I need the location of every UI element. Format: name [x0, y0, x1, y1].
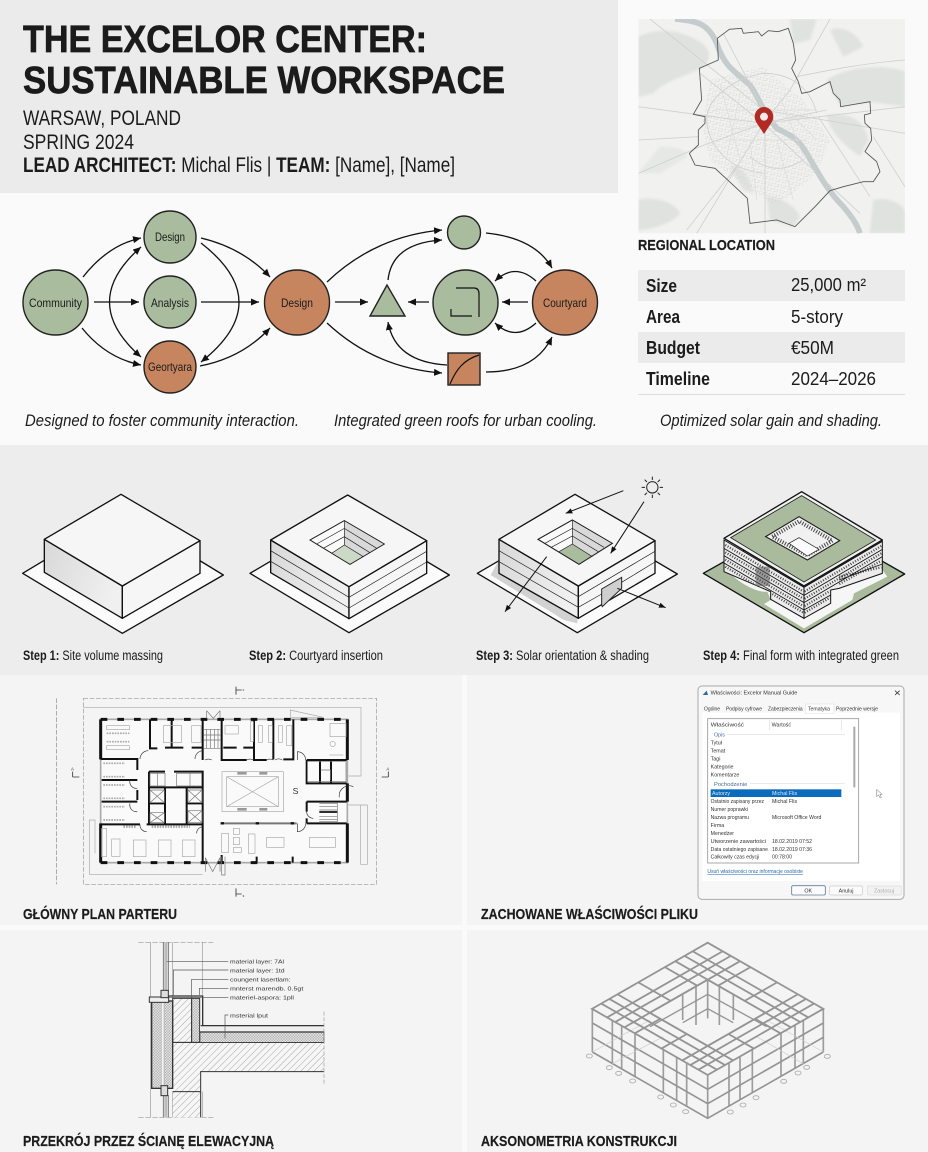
dialog list: Kategorie [711, 765, 734, 771]
row: budget: €50M [791, 338, 834, 358]
panel: structural axonometry [467, 930, 928, 1152]
step 1 diagram [23, 494, 223, 633]
heading: file properties: ZACHOWANE WŁAŚCIWOŚCI PLIKU [481, 905, 698, 923]
dialog list: Tagi [711, 757, 720, 763]
river [675, 19, 860, 233]
dialog list: Numer poprawki [711, 807, 748, 813]
material labels: coungent lasertlam: [230, 978, 291, 984]
project details [23, 107, 455, 177]
door swings [130, 751, 353, 833]
solar arrows [505, 491, 666, 612]
lower floor frames [592, 1023, 823, 1118]
panel: file properties [467, 675, 928, 925]
material labels: material layer: 1td [230, 969, 285, 975]
project details: SPRING 2024 [23, 131, 134, 154]
section marks [73, 687, 388, 897]
dialog list: Komentarze [711, 773, 739, 779]
dialog tabs: Podpisy cyfrowe [726, 707, 762, 713]
dialog buttons: OK [804, 888, 812, 894]
facade panel [152, 1001, 173, 1088]
city boundary [689, 28, 880, 227]
cursor icon [877, 789, 882, 798]
node: geortyara [144, 341, 196, 393]
project details: WARSAW, POLAND [23, 107, 181, 130]
map: regional location [638, 19, 905, 233]
footing markers [586, 1054, 830, 1114]
panel: floor plan [0, 675, 462, 925]
node: courtyard [532, 270, 598, 335]
node: geortyara: Geortyara [148, 360, 192, 374]
icon: map pin [755, 107, 773, 134]
header panel [0, 0, 618, 193]
dialog list [708, 719, 859, 863]
floor plan drawing: c [243, 688, 245, 692]
stairs and lifts [150, 711, 346, 875]
dialog window [698, 686, 904, 899]
concrete slab [173, 1042, 324, 1117]
dialog list: Właściwość [711, 723, 744, 729]
dialog list: Menedżer [711, 831, 734, 837]
row: timeline: 2024–2026 [791, 369, 876, 389]
node: analysis: Analysis [151, 296, 189, 310]
step 1 label: Step 1: Site volume massing [23, 648, 163, 663]
dialog list: Pochodzenie [714, 782, 747, 788]
row: area: 5-story [791, 307, 843, 327]
dialog tabs: Zabezpieczenia [768, 707, 803, 713]
row: area: Area [646, 307, 681, 327]
material labels: msterial lput [230, 1013, 269, 1019]
node: design hub: Design [281, 296, 313, 310]
dialog tabs: Tematyka [808, 707, 830, 713]
dialog list: Michal Flis [772, 799, 797, 805]
inner courtyard columns [683, 980, 733, 1025]
caption: green roofs: Integrated green roofs for urban cooling. [334, 411, 597, 430]
caption: community: Designed to foster community interaction. [25, 411, 299, 430]
dialog buttons: Zastosuj [874, 888, 894, 894]
panel: design steps [0, 445, 928, 675]
dialog buttons [792, 886, 901, 895]
dialog tabs: Ogólne [704, 707, 720, 713]
material labels: material layer: 7Al [230, 960, 284, 966]
dialog list: 18.02.2019 07:52 [772, 839, 812, 845]
floor plan drawing: S [293, 786, 299, 796]
floor plan drawing: s [243, 894, 245, 898]
floor layers [200, 1032, 324, 1042]
dialog list: Ostatnio zapisany przez [711, 799, 764, 805]
node: triangle [370, 285, 405, 316]
dialog list: Opis [714, 733, 725, 739]
dialog list: Utworzenie zawartości [711, 839, 766, 845]
step 4 label: Step 4: Final form with integrated green [703, 648, 899, 663]
step 2 diagram [250, 495, 449, 633]
dialog list: Nazwa programu [711, 815, 749, 821]
step labels [23, 648, 899, 663]
row: budget [646, 338, 834, 358]
data table [638, 270, 905, 394]
section drawing [138, 942, 324, 1117]
floor plan drawing: A [386, 767, 389, 772]
step 3 label: Step 3: Solar orientation & shading [476, 648, 649, 663]
floor plan drawing: A [71, 767, 74, 772]
dialog buttons: Anuluj [839, 888, 853, 894]
row: size: Size [646, 276, 677, 296]
dialog window: Właściwości: Excelor Manual Guide [711, 691, 797, 697]
row: size [646, 275, 866, 296]
node: courtyard: Courtyard [543, 296, 587, 310]
leader lines [167, 962, 228, 1038]
flow arrows [82, 230, 552, 373]
concept flow diagram [23, 211, 598, 393]
node: curve square [448, 353, 480, 385]
material labels [230, 960, 304, 1019]
node: green circle with icon [433, 270, 498, 335]
title: SUSTAINABLE WORKSPACE [23, 60, 505, 102]
row: size: 25,000 m² [791, 275, 866, 295]
panel: wall section [0, 930, 462, 1152]
column grid [592, 1009, 823, 1118]
heading: axonometry: AKSONOMETRIA KONSTRUKCJI [481, 1133, 677, 1150]
interior walls [101, 719, 347, 863]
courtyard columns [683, 980, 733, 1025]
heading: wall section: PRZEKRÓJ PRZEZ ŚCIANĘ ELEWACYJNĄ [23, 1132, 274, 1150]
icon: sun [642, 477, 663, 498]
node: design hub [264, 270, 330, 335]
row: timeline: Timeline [646, 369, 710, 389]
node: community: Community [29, 296, 82, 310]
node: community [23, 270, 88, 335]
step 3 diagram [477, 477, 677, 633]
caption: solar: Optimized solar gain and shading. [660, 411, 882, 430]
atrium [222, 772, 283, 812]
step 4 diagram [703, 492, 905, 633]
title: THE EXCELOR CENTER: [23, 19, 427, 61]
row: budget: Budget [646, 338, 700, 358]
material labels: mnterst marendb. 0.5gt [230, 987, 304, 993]
street texture [702, 67, 830, 207]
upstand [173, 998, 192, 1042]
dialog tabs: Poprzednie wersje [836, 707, 878, 713]
node: analysis [144, 276, 196, 328]
dialog list: Autorzy [712, 791, 730, 797]
row: area [646, 307, 843, 327]
dialog list: Microsoft Office Word [772, 815, 821, 821]
dialog link: Usuń właściwości oraz informacje osobiste [707, 869, 803, 875]
dialog list: Całkowity czas edycji [711, 855, 759, 861]
step 2 label: Step 2: Courtyard insertion [249, 648, 383, 663]
furniture [102, 709, 346, 857]
dialog list: Data ostatniego zapisane [711, 847, 768, 853]
material labels: materiel-aspora: 1pll [230, 995, 294, 1001]
dialog list: Firma [711, 823, 724, 829]
project details: LEAD ARCHITECT: Michal Flis | TEAM: [Name], [Name] [23, 154, 455, 177]
perimeter walls [101, 719, 347, 863]
title [23, 19, 505, 102]
courtyard opening mask [650, 980, 765, 1046]
dialog list: 18.02.2019 07:36 [772, 847, 812, 853]
dialog list: Wartość [772, 723, 791, 729]
dialog list: Tytuł [711, 741, 723, 747]
node: design [144, 211, 196, 263]
structural frame [586, 943, 830, 1118]
dialog list: Temat [711, 749, 726, 755]
node: small circle [448, 216, 480, 249]
floor plan drawing [57, 687, 389, 898]
dialog list: Michal Flis [772, 791, 797, 797]
dialog list: 00:78:00 [772, 855, 792, 861]
heading: floor plan: GŁÓWNY PLAN PARTERU [23, 905, 177, 923]
dialog tabs [704, 704, 878, 713]
roof grid [592, 943, 823, 1075]
node: design: Design [155, 230, 185, 244]
row: timeline [646, 369, 876, 389]
map caption: REGIONAL LOCATION [638, 237, 775, 254]
